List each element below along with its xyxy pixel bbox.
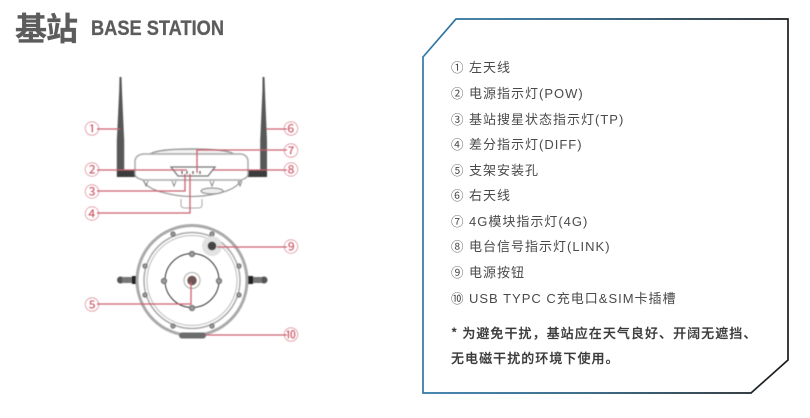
heading: English title: BASE STATION: [91, 17, 224, 40]
legend item 10: ⑩: [451, 288, 464, 307]
screw holes: [143, 232, 241, 328]
callout numbers: ④: [84, 203, 100, 224]
power button: [202, 236, 222, 256]
title: [15, 11, 224, 47]
legend item 9: [451, 262, 525, 281]
callout numbers: ②: [84, 159, 100, 180]
right connector: [245, 276, 268, 284]
usage note: [451, 323, 757, 367]
legend item 7: ⑦: [451, 211, 464, 230]
heading: Chinese title: 基站: [15, 11, 78, 47]
legend item 4: 差分指示灯(DIFF): [469, 137, 583, 152]
callout numbers: ①: [84, 118, 100, 139]
legend item 1: [451, 57, 511, 76]
legend item 1: ①: [451, 57, 464, 76]
legend item 2: [451, 83, 584, 102]
legend item 7: 4G模块指示灯(4G): [469, 214, 588, 229]
legend item 4: ④: [451, 134, 464, 153]
legend item 8: ⑧: [451, 236, 464, 255]
callout numbers: ⑦: [283, 140, 299, 161]
legend item 7: [451, 211, 588, 230]
legend item 4: [451, 134, 583, 153]
device lower latch: [201, 188, 223, 194]
legend item 5: 支架安装孔: [469, 163, 539, 178]
callout numbers: ⑥: [283, 118, 299, 139]
icon: left antenna: [117, 77, 124, 177]
device main band: [135, 154, 248, 180]
USB port: [179, 332, 206, 338]
callout numbers: ⑧: [283, 159, 299, 180]
usage note: * 为避免干扰，基站应在天气良好、开阔无遮挡、: [451, 323, 757, 342]
device top cap: [150, 149, 234, 154]
diagram: base station views: [84, 77, 299, 345]
indicator window: [171, 167, 215, 176]
centre plate: [165, 254, 219, 308]
indicator LEDs: [182, 171, 200, 174]
legend item 1: 左天线: [469, 60, 511, 75]
usage note: 无电磁干扰的环境下使用。: [451, 348, 620, 367]
callout lines: [97, 129, 287, 335]
legend item 3: ③: [451, 109, 464, 128]
device body: [135, 149, 248, 196]
middle ring: [144, 232, 240, 328]
outer ring: [137, 226, 247, 336]
device mount stub: [181, 199, 202, 208]
legend item 2: ②: [451, 83, 464, 102]
bottom view of base station: [117, 226, 268, 338]
legend item 5: ⑤: [451, 160, 464, 179]
callout numbers: [84, 118, 299, 345]
legend item 3: 基站搜星状态指示灯(TP): [469, 112, 624, 127]
icon: left antenna connector: [117, 170, 136, 177]
left connector: [117, 276, 140, 284]
callout numbers: ③: [84, 181, 100, 202]
legend item 6: ⑥: [451, 185, 464, 204]
callout numbers: ⑤: [84, 294, 100, 315]
device lower dome: [143, 180, 241, 196]
legend item 9: ⑨: [451, 262, 464, 281]
panel border: [423, 19, 788, 393]
mounting hole: [184, 272, 200, 288]
icon: right antenna connector: [248, 170, 267, 177]
legend item 5: [451, 160, 539, 179]
legend item 2: 电源指示灯(POW): [469, 86, 584, 101]
legend item 6: 右天线: [469, 188, 511, 203]
callout numbers: ⑩: [283, 324, 299, 345]
icon: right antenna: [260, 77, 267, 177]
panel: legend: [423, 19, 788, 393]
legend item 6: [451, 185, 511, 204]
side view of base station: [117, 77, 267, 208]
inner ring: [147, 236, 237, 326]
device feet: [144, 181, 242, 186]
legend list: [451, 57, 677, 307]
legend item 9: 电源按钮: [469, 265, 525, 280]
legend item 10: USB TYPC C充电口&SIM卡插槽: [469, 291, 677, 306]
legend item 8: 电台信号指示灯(LINK): [469, 239, 611, 254]
callout numbers: ⑨: [283, 236, 299, 257]
